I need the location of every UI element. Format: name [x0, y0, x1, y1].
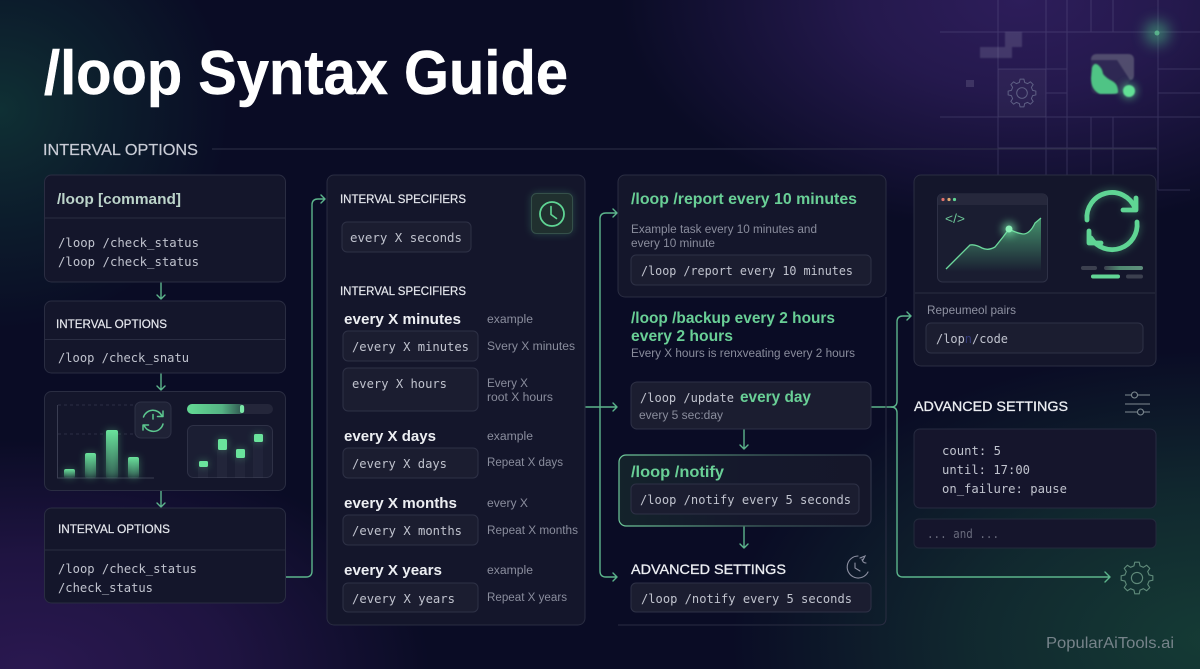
row: minutes: Svery X minutes	[487, 341, 575, 353]
example card: update: every day	[740, 389, 811, 406]
example: backup	[631, 310, 855, 360]
panel: and: ... and ...	[927, 526, 999, 541]
panel: interval specifiers	[327, 175, 585, 625]
example card: update: every 5 sec:day	[639, 410, 723, 422]
row: months: Repeat X months	[487, 525, 578, 537]
row: months	[343, 495, 578, 545]
example card: report: /loop /report every 10 minutes	[641, 263, 853, 278]
row: minutes: every X minutes	[344, 311, 461, 328]
example card: report	[618, 175, 886, 297]
panel: interval options: /loop /check_snatu	[58, 350, 189, 365]
row: months: every X	[487, 498, 528, 510]
row: hours	[343, 368, 553, 411]
panel: /loop [command]: /loop [command]	[57, 191, 181, 208]
panel: interval options lower	[44, 508, 286, 603]
connector arrows	[157, 195, 1110, 582]
window chart	[938, 194, 1048, 282]
panel: interval options	[44, 301, 286, 373]
panel: /loop [command]: /loop /check_status	[58, 254, 199, 269]
example: backup: every 2 hours	[631, 328, 733, 345]
icon: timer sync	[847, 556, 868, 578]
heading: advanced settings: ADVANCED SETTINGS	[914, 398, 1068, 414]
watermark: PopularAiTools.ai	[1046, 635, 1174, 652]
glowing dot	[1145, 21, 1169, 45]
row: days	[343, 428, 563, 478]
mini chart	[188, 426, 272, 478]
example card: update	[631, 382, 871, 429]
panel: and	[914, 519, 1156, 548]
example card: report: /loop /report every 10 minutes	[631, 191, 857, 208]
advanced settings example: /loop /notify every 5 seconds	[641, 591, 852, 606]
row: days: example	[487, 431, 533, 443]
chip: every X seconds	[342, 222, 471, 252]
row: months: /every X months	[352, 523, 462, 538]
panel: /loop [command]: /loop /check_status	[58, 235, 199, 250]
row: minutes	[343, 311, 575, 361]
row: minutes: /every X minutes	[352, 339, 469, 354]
icon: clock	[531, 193, 573, 234]
status bars	[1081, 266, 1143, 278]
row: hours: root X hours	[487, 392, 553, 404]
progress bar	[187, 404, 273, 414]
panel: interval options: INTERVAL OPTIONS	[56, 319, 167, 331]
panel: interval options lower: INTERVAL OPTIONS	[58, 524, 170, 536]
decorative tech panel: top right	[940, 0, 1200, 190]
row: minutes: example	[487, 314, 533, 326]
panel: interval specifiers: INTERVAL SPECIFIERS	[340, 194, 466, 206]
row: hours: Every X	[487, 378, 528, 390]
icon: sync arrows	[1087, 192, 1137, 250]
advanced settings example: ADVANCED SETTINGS	[631, 561, 786, 577]
panel: repeated pairs: Repeumeol pairs	[927, 303, 1016, 317]
example card: update: /loop /update	[640, 390, 734, 405]
example card: notify: /loop /notify every 5 seconds	[640, 492, 851, 507]
panel: settings code: until: 17:00	[942, 462, 1030, 477]
example card: report: Example task every 10 minutes and	[631, 224, 817, 236]
advanced settings example	[631, 556, 871, 612]
icon: clock sync	[135, 402, 171, 438]
row: days: Repeat X days	[487, 457, 563, 469]
chip: every X seconds: every X seconds	[350, 230, 462, 245]
panel: settings code: on_failure: pause	[942, 481, 1067, 496]
title: /loop Syntax Guide	[44, 39, 568, 108]
row: years: /every X years	[352, 591, 455, 606]
panel: settings code	[914, 429, 1156, 508]
example card: notify: /loop /notify	[631, 464, 724, 481]
row: years: example	[487, 565, 533, 577]
example: backup: Every X hours is renxveating every 2 hours	[631, 348, 855, 360]
panel: charts	[44, 392, 286, 490]
example: backup: /loop /backup every 2 hours	[631, 310, 835, 327]
panel: interval options lower: /check_status	[58, 580, 153, 595]
panel: interval options lower: /loop /check_status	[58, 561, 197, 576]
row: years: Repeat X years	[487, 592, 567, 604]
section heading: interval options: INTERVAL OPTIONS	[43, 142, 198, 159]
panel: settings code: count: 5	[942, 443, 1001, 458]
row: months: every X months	[344, 495, 457, 512]
icon: logo mark	[1091, 54, 1137, 99]
panel: examples	[618, 175, 886, 625]
row: years: every X years	[344, 562, 442, 579]
panel: /loop [command]	[44, 175, 286, 282]
row: hours: every X hours	[352, 376, 447, 391]
bar chart	[58, 405, 154, 478]
row: days: every X days	[344, 428, 436, 445]
icon: faint gear	[1008, 79, 1036, 107]
row: years	[343, 562, 567, 612]
panel: repeated pairs: /lopn/code	[936, 331, 1008, 346]
icon: sliders	[1125, 392, 1150, 415]
row: days: /every X days	[352, 456, 447, 471]
example card: report: every 10 minute	[631, 238, 715, 250]
panel: repeated pairs	[914, 175, 1156, 366]
panel: interval specifiers: INTERVAL SPECIFIERS	[340, 286, 466, 298]
window chart: </>	[945, 211, 965, 226]
example card: notify	[619, 455, 871, 526]
icon: gear	[1121, 562, 1153, 594]
